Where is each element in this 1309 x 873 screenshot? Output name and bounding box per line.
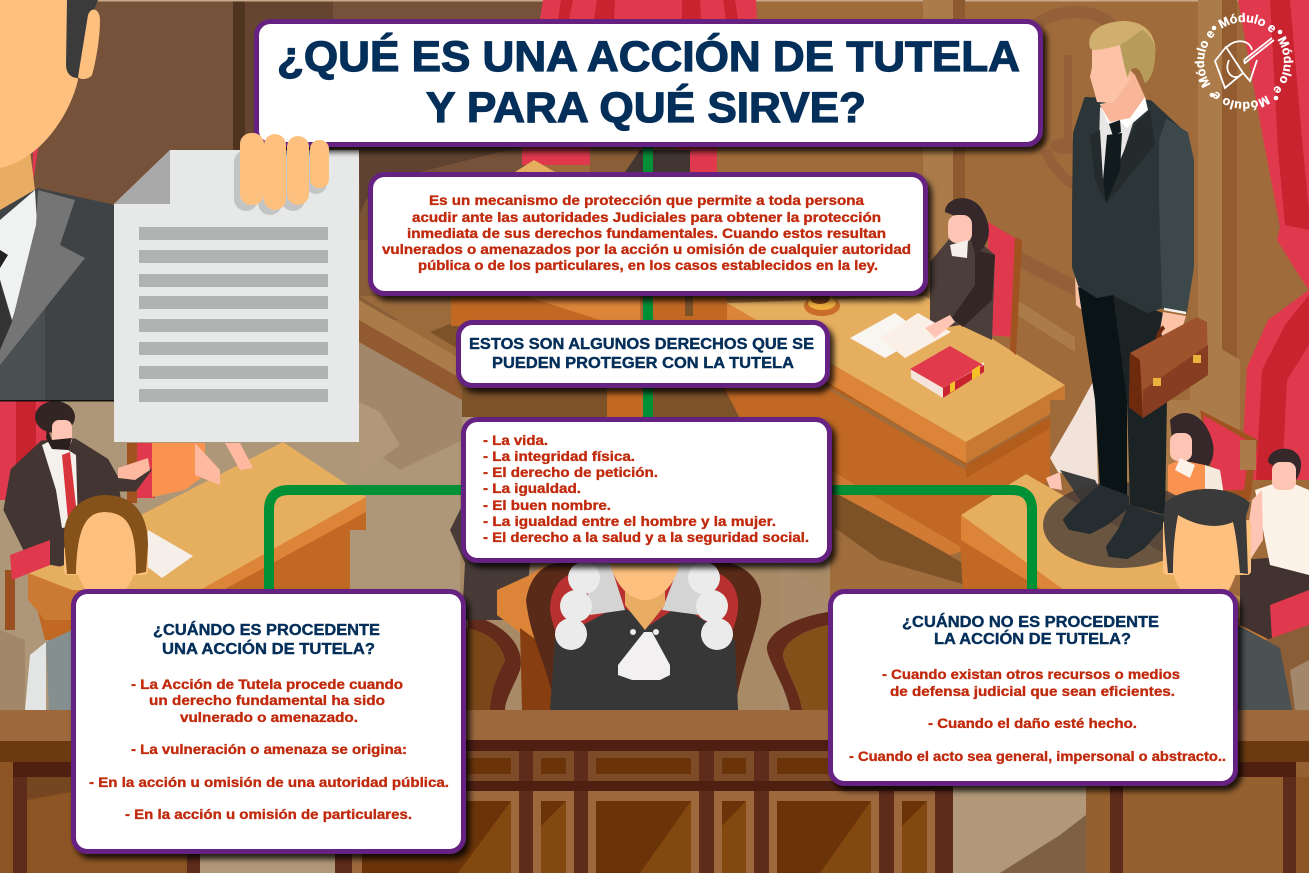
panel text: de defensa judicial que sean eficientes. <box>890 684 1175 699</box>
right floor <box>828 470 966 600</box>
panel text: - En la acción u omisión de particulares. <box>125 807 412 822</box>
right wall <box>923 0 953 300</box>
definition text: Es un mecanismo de protección que permite a toda persona <box>429 193 865 208</box>
logo ring text <box>1194 12 1294 112</box>
panel: rights heading <box>458 322 828 386</box>
witness desk <box>960 515 1160 720</box>
title: ¿QUÉ ES UNA ACCIÓN DE TUTELA <box>277 32 1020 81</box>
panel text: - Cuando el daño esté hecho. <box>928 716 1137 731</box>
left bench section <box>0 741 335 873</box>
logo ring text: Módulo e <box>1218 12 1275 32</box>
panel: rights list <box>464 420 830 560</box>
definition text: inmediata de sus derechos fundamentales. Cuando estos resultan <box>407 226 886 241</box>
title panel <box>256 22 1040 144</box>
rights heading text: PUEDEN PROTEGER CON LA TUTELA <box>492 355 794 372</box>
panel text <box>849 667 1226 764</box>
floor <box>0 400 840 720</box>
back right wall behind witness <box>1050 400 1110 480</box>
panel text: vulnerado o amenazado. <box>180 710 358 725</box>
illustration: judge <box>450 500 828 710</box>
judge bench desk <box>720 330 966 550</box>
icon: document <box>114 150 359 442</box>
illustration: judge bench <box>0 710 1309 873</box>
logo ring text: Módulo e <box>1194 31 1214 88</box>
definition text: vulnerados o amenazados por la acción u omisión de cualquier autoridad <box>382 242 911 257</box>
panel text: - La vulneración o amenaza se origina: <box>131 742 407 757</box>
logo ring text: Módulo e <box>1274 36 1294 93</box>
rights list text: - La igualdad entre el hombre y la mujer. <box>483 514 776 529</box>
panel text: - La Acción de Tutela procede cuando <box>131 677 403 692</box>
panel heading: ¿CUÁNDO ES PROCEDENTE <box>153 622 380 639</box>
left floor edge <box>0 630 25 710</box>
logo icon <box>1215 38 1274 88</box>
icon: stamp <box>804 292 840 316</box>
panel heading: ¿CUÁNDO NO ES PROCEDENTE <box>902 614 1159 631</box>
panel heading <box>902 614 1159 648</box>
rights list text <box>483 433 809 545</box>
logo ring text: Módulo e <box>1213 92 1270 112</box>
illustration: back people right <box>1046 378 1309 710</box>
panel text: - Cuando el acto sea general, impersonal o abstracto.. <box>849 749 1226 764</box>
title: Y PARA QUÉ SIRVE? <box>426 84 866 132</box>
panel: when it does not apply <box>830 592 1236 784</box>
logo: Módulo e <box>1194 12 1294 112</box>
center curtain <box>540 0 757 19</box>
rights list text: - El derecho a la salud y a la seguridad social. <box>483 530 809 545</box>
definition text: acudir ante las autoridades Judiciales para obtener la protección <box>412 210 881 225</box>
rights heading text: ESTOS SON ALGUNOS DERECHOS QUE SE <box>469 336 814 353</box>
icon: red book <box>910 346 984 398</box>
rights list text: - El buen nombre. <box>483 498 611 513</box>
panel heading: LA ACCIÓN DE TUTELA? <box>934 630 1131 648</box>
center desk fragment <box>451 296 641 326</box>
connector lines <box>269 140 1032 595</box>
panel: definition <box>370 174 926 294</box>
right curtain <box>1238 0 1309 290</box>
illustration: clerk woman with papers, book and stamp <box>804 198 1022 398</box>
panel text: un derecho fundamental ha sido <box>149 693 385 708</box>
rights list text: - El derecho de petición. <box>483 465 658 480</box>
left desk <box>28 505 366 640</box>
panel: when it applies <box>74 592 464 852</box>
panel heading <box>153 622 380 658</box>
panel heading: UNA ACCIÓN DE TUTELA? <box>162 640 375 658</box>
rights heading text <box>469 336 814 372</box>
rights list text: - La integridad física. <box>483 449 635 464</box>
foreground man right <box>1163 489 1292 710</box>
definition text <box>382 193 911 273</box>
definition text: pública o de los particulares, en los casos establecidos en la ley. <box>418 258 878 273</box>
foreground man left <box>25 495 148 710</box>
icon: briefcase <box>1129 317 1208 418</box>
gap and right bench section <box>953 741 1309 873</box>
panel text <box>89 677 449 822</box>
title <box>277 32 1020 132</box>
panel text: - En la acción u omisión de una autoridad pública. <box>89 775 449 790</box>
rights list text: - La vida. <box>483 433 548 448</box>
hand holding document <box>240 133 329 210</box>
panel text: - Cuando existan otros recursos o medios <box>882 667 1180 682</box>
illustration: back people left <box>0 400 253 580</box>
illustration: big man with document <box>0 0 359 442</box>
icon: hand shadow on document <box>234 150 327 215</box>
illustration: tall man with briefcase <box>1043 21 1208 568</box>
center bench section <box>335 740 953 873</box>
rights list text: - La igualdad. <box>483 481 581 496</box>
